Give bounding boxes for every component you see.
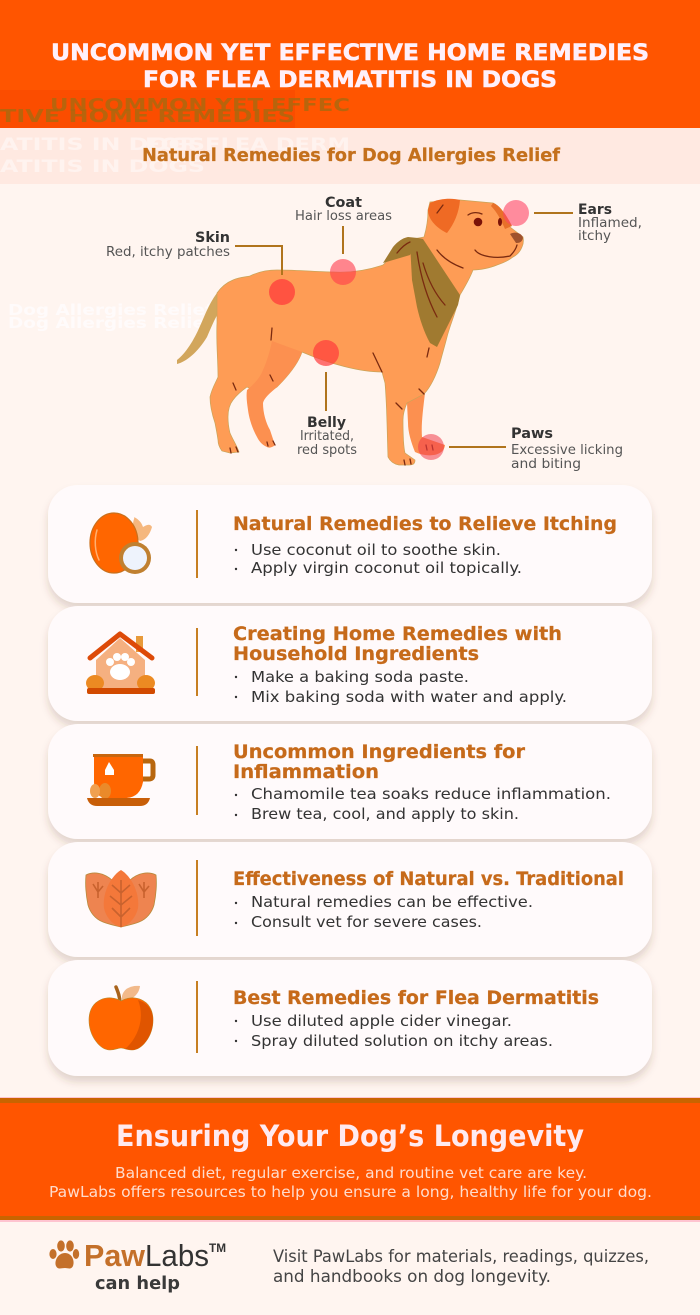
far hind leg (247, 341, 302, 448)
subtitle band: ATITIS IN DOGS (0, 157, 205, 177)
hotspot: paws: Paws (511, 426, 553, 442)
bullet list: Make a baking soda paste. (251, 668, 469, 686)
heading (233, 623, 562, 665)
hotspot: belly (297, 340, 357, 458)
hotspot: belly: Irritated, (300, 428, 354, 444)
ear left (428, 199, 460, 233)
bandana (383, 237, 460, 347)
dog body (210, 200, 523, 465)
panel: effectiveness (48, 842, 652, 957)
banner text (49, 1164, 652, 1201)
footer text: and handbooks on dog longevity. (273, 1267, 551, 1286)
hotspot: paws: and biting (511, 456, 581, 472)
panel: best remedies (48, 960, 652, 1076)
heading: Natural Remedies to Relieve Itching (233, 513, 617, 535)
header banner (0, 0, 700, 128)
face and body creases (230, 205, 517, 465)
subtitle band: FOR FLEA DERM (145, 135, 350, 155)
eyes and nose (474, 218, 523, 243)
bullet list: Mix baking soda with water and apply. (251, 688, 567, 706)
hotspot: ears: Ears (578, 202, 612, 218)
heading: Best Remedies for Flea Dermatitis (233, 987, 599, 1009)
banner text: PawLabs offers resources to help you ensure a long, healthy life for your dog. (49, 1183, 652, 1201)
faint background lettering: Dog Allergies Relief (8, 314, 214, 332)
hotspot: ears: itchy (578, 228, 611, 244)
panel: creating home remedies (48, 606, 652, 721)
logo: PawLabs can help: Labs (145, 1238, 209, 1273)
title (51, 41, 649, 93)
subtitle band: ATITIS IN DOGS (0, 135, 205, 155)
hotspot: paws: Excessive licking (511, 442, 623, 458)
icon: house with paw (86, 634, 155, 694)
title: FOR FLEA DERMATITIS IN DOGS (143, 68, 557, 93)
dog illustration (177, 199, 523, 465)
heading: Inflammation (233, 761, 379, 783)
bullet list: Brew tea, cool, and apply to skin. (251, 805, 519, 823)
logo: PawLabs can help: Paw (84, 1238, 146, 1273)
bullet list: Consult vet for severe cases. (251, 913, 482, 931)
hotspot: belly: red spots (297, 442, 357, 458)
hotspot: ears (503, 200, 642, 244)
hotspot: coat: Coat (325, 195, 362, 211)
panel: uncommon ingredients (48, 724, 652, 839)
logo: PawLabs can help (49, 1238, 226, 1294)
bullet list: Spray diluted solution on itchy areas. (251, 1032, 553, 1050)
banner text: Balanced diet, regular exercise, and routine vet care are key. (115, 1164, 587, 1182)
far front leg (407, 345, 445, 455)
bullet list: Use diluted apple cider vinegar. (251, 1012, 512, 1030)
hotspot: paws (418, 426, 623, 472)
hotspot: skin (106, 230, 295, 305)
longevity banner (0, 1097, 700, 1222)
banner heading: Ensuring Your Dog’s Longevity (116, 1119, 584, 1153)
header banner: TIVE HOME REMEDIES (0, 106, 295, 127)
bullet list: Chamomile tea soaks reduce inflammation. (251, 785, 611, 803)
icon: paw (49, 1240, 79, 1268)
icon: leaves (86, 870, 156, 927)
tail (177, 293, 219, 364)
hotspot: belly: Belly (307, 415, 347, 431)
subtitle band (0, 128, 700, 184)
bullet list: Use coconut oil to soothe skin. (251, 541, 501, 559)
footer text (273, 1247, 649, 1286)
hotspot: coat: Hair loss areas (295, 208, 392, 224)
faint background lettering: Dog Allergies Relief (8, 301, 214, 319)
logo: PawLabs can help: TM (209, 1241, 226, 1255)
heading: Creating Home Remedies with (233, 623, 562, 645)
icon: coconut (90, 513, 152, 574)
bullet list (235, 785, 611, 823)
bullet list (235, 893, 533, 931)
title: UNCOMMON YET EFFECTIVE HOME REMEDIES (51, 41, 649, 66)
icon: tea cup (87, 754, 153, 806)
bullet list (235, 668, 567, 706)
heading: Effectiveness of Natural vs. Traditional (233, 868, 624, 890)
heading: Uncommon Ingredients for (233, 741, 526, 763)
subtitle: Natural Remedies for Dog Allergies Relief (142, 145, 560, 166)
panel: natural remedies to relieve itching (48, 485, 652, 603)
hotspot: skin: Red, itchy patches (106, 244, 230, 260)
bullet list (235, 541, 522, 577)
bullet list: Natural remedies can be effective. (251, 893, 533, 911)
icon: apple (89, 986, 153, 1050)
heading: Household Ingredients (233, 643, 479, 665)
logo: PawLabs can help: can help (95, 1273, 180, 1294)
header banner: UNCOMMON YET EFFEC (50, 95, 350, 116)
hotspot: skin: Skin (195, 230, 230, 246)
hotspot: coat (295, 195, 392, 285)
ear right (491, 203, 512, 229)
hotspot: ears: Inflamed, (578, 215, 642, 231)
bullet list (235, 1012, 553, 1050)
bullet list: Apply virgin coconut oil topically. (251, 559, 522, 577)
faint background lettering (8, 301, 214, 332)
footer text: Visit PawLabs for materials, readings, quizzes, (273, 1247, 649, 1266)
heading (233, 741, 526, 783)
